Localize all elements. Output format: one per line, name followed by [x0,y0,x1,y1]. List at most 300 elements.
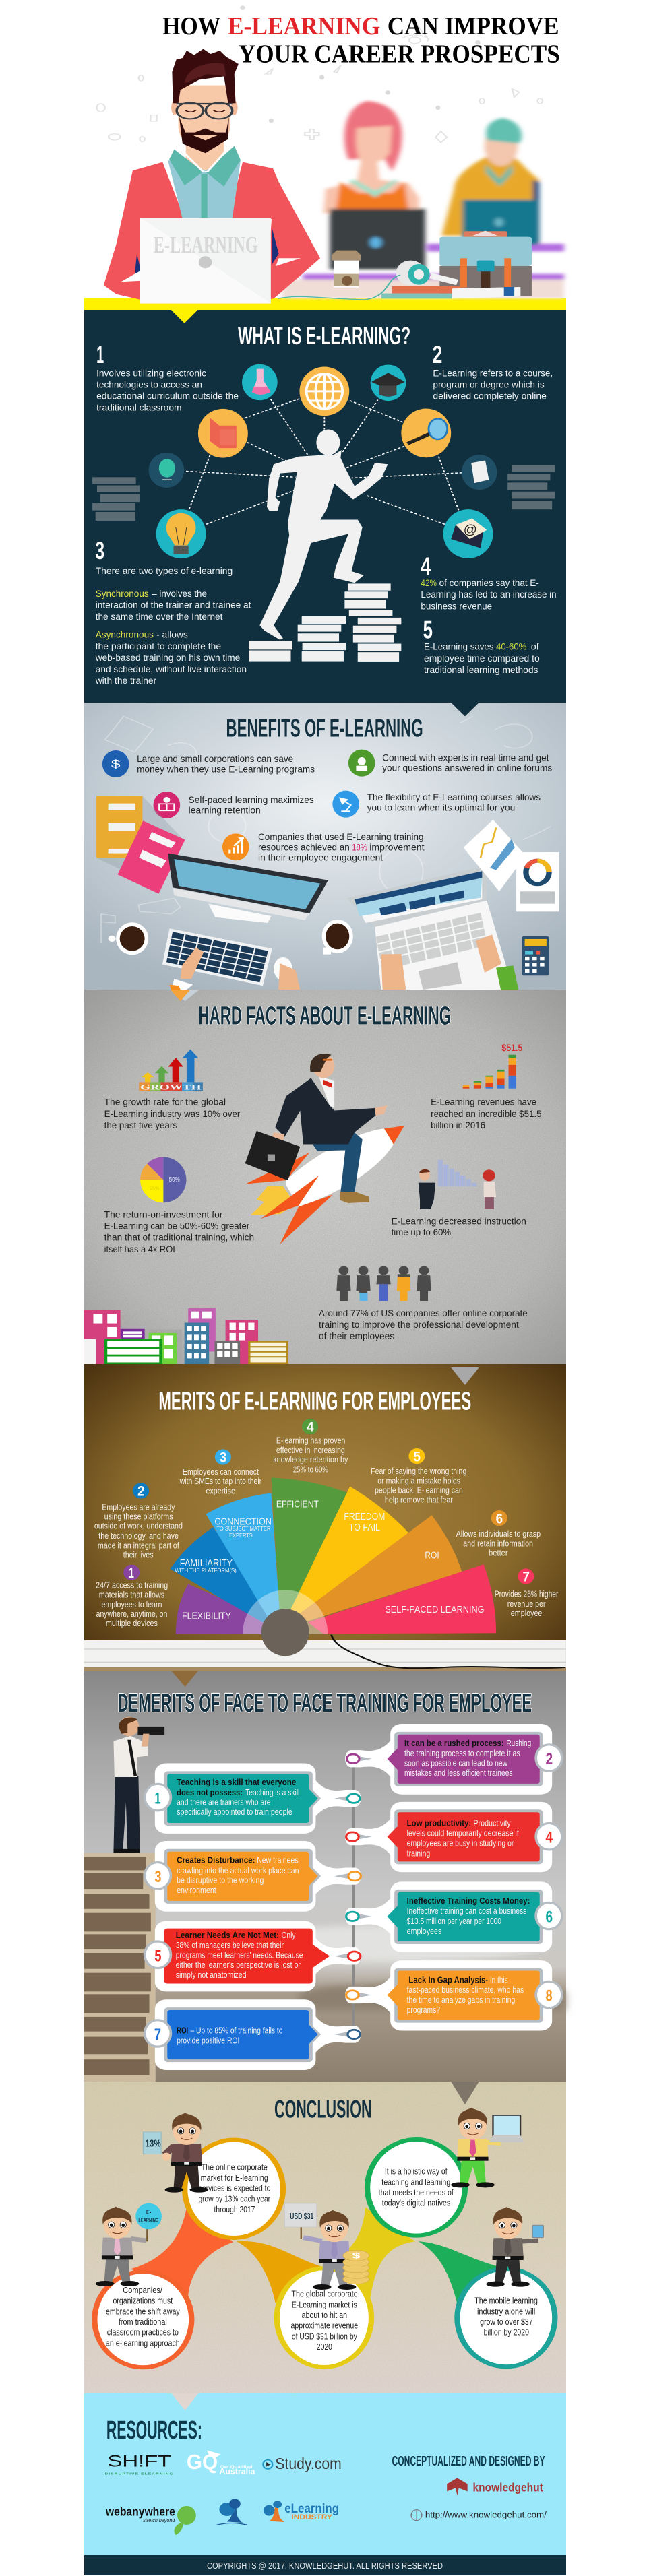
card 5: Only [282,1931,296,1941]
card 4: Productivity [473,1818,511,1828]
text block 2: E-Learning refers to a course, [433,368,553,379]
panel: merits [84,1364,566,1672]
text block 5: of [531,642,540,652]
panel: conclusion [84,2082,566,2393]
merit 6: 6 [496,1511,503,1526]
benefit: connect with experts: your questions answered in online forums [382,763,552,773]
benefit: engagement: resources achieved an [258,842,350,853]
card 6: Ineffective Training Costs Money: [407,1896,530,1906]
pie chart [140,1157,186,1202]
card 8: Lack In Gap Analysis- [408,1975,488,1985]
text: return on investment: itself has a 4x ROI [104,1244,175,1254]
footer bar: COPYRIGHTS @ 2017. KNOWLEDGEHUT. ALL RIGHTS RESERVED [207,2561,443,2571]
timeline [352,1754,355,2037]
benefit: connect with experts [348,750,552,777]
icon: graduation cap [371,364,406,401]
card 1: specifically appointed to train people [177,1807,292,1817]
icon: man with laptop: E-LEARNING [154,232,258,258]
text: return on investment [104,1209,254,1254]
icon: city buildings [84,1308,288,1364]
logo: get qualified australia: Australia [219,2467,255,2476]
card 8: fast-paced business climate, who has [407,1985,524,1995]
icon: globe [299,367,349,416]
segment labels: CONNECTION [214,1516,272,1527]
card 7 [145,1999,361,2070]
circle 4: today's digital natives [382,2199,451,2208]
merit 7: employee [511,1609,542,1618]
text block 2: delivered completely online [433,391,547,401]
merit 1: 24/7 access to training [96,1581,168,1590]
merit 3: with SMEs to tap into their [179,1477,261,1486]
figure: man with 13% sign [143,2113,208,2193]
text block 4: 42% [421,578,437,589]
benefit: engagement: improvement [369,842,425,853]
circle 4 [367,2139,465,2236]
circle 3: The global corporate [291,2290,358,2299]
card 2 [345,1724,562,1795]
benefit: flexibility: you to learn when its optimal for you [367,802,515,813]
benefit: engagement: 18% [352,842,367,853]
text block 4: 4 [421,552,431,580]
benefit: flexibility [332,791,541,818]
text block 1: educational curriculum outside the [96,391,239,401]
segment labels: TO FAIL [349,1522,380,1533]
merit 4: E-learning has proven [276,1436,345,1446]
merit 3: Employees can connect [183,1467,259,1477]
figure: man with tablet [486,2207,543,2287]
circle 5: industry alone will [477,2307,535,2317]
text: revenues [431,1097,541,1130]
icon: red book [198,409,248,458]
text block 3: There are two types of e-learning [96,566,233,576]
text: corporate training: Around 77% of US companies offer online corporate [319,1308,528,1318]
benefit: save money: Large and small corporations can save [137,754,293,764]
text: growth rate: the past five years [104,1120,177,1130]
merit 3 [179,1449,261,1496]
segment labels: WITH THE PLATFORM(S) [175,1568,237,1574]
card 5: simply not anatomized [176,1970,247,1981]
card 5: 38% of managers believe that their [176,1941,284,1951]
card 5 [145,1921,361,1991]
circle 5 [457,2269,555,2366]
merit 5: people back. E-learning can [375,1486,463,1495]
logo: shift: DISRUPTIVE ELEARNING [105,2472,173,2476]
text block 1: traditional classroom [96,403,182,413]
bar chart: revenues: $51.5 [501,1043,522,1053]
logo: get qualified australia: Get Qualified [220,2464,253,2470]
benefit: save money [102,750,315,777]
logo: get qualified australia: GQ [187,2450,218,2474]
card 4: training [407,1848,430,1859]
icon: magnifier [401,409,451,457]
segment labels: FREEDOM [344,1511,385,1522]
panel: benefits [84,703,566,990]
benefit: engagement: in their employee engagement [258,852,383,863]
icon: man with laptop [104,49,320,304]
merit 5 [371,1448,466,1505]
text: revenues: billion in 2016 [431,1120,485,1130]
logo: shift: S H ! F T [107,2453,171,2470]
icon: email [443,509,493,558]
footer bar [84,2555,566,2575]
merit 5: Fear of saying the wrong thing [371,1467,466,1476]
arrow: orange and blue notch [171,990,198,1001]
card 4: 4 [545,1829,553,1846]
icon: growth arrows [139,1049,203,1091]
card 6: employees [407,1927,441,1937]
text block 3: interaction of the trainer and trainee at [96,600,251,610]
title: E-LEARNING [228,11,380,40]
segment labels: FAMILIARITY [180,1557,233,1568]
circle 3: E-Learning market is [292,2300,357,2310]
logo: webanywhere [105,2505,196,2535]
card 2: It can be a rushed process: [404,1739,504,1748]
panel: what is e-learning [84,310,566,703]
merit 2: made it an integral part of [98,1541,179,1551]
text: revenues: E-Learning revenues have [431,1097,536,1107]
figure: man with 13% sign: 13% [146,2137,161,2149]
merit 5: 5 [413,1449,421,1464]
circle 1: classroom practices to [107,2328,179,2338]
merit 2 [94,1483,183,1560]
heading: WHAT IS E-LEARNING? [238,321,410,350]
logo: get qualified australia [187,2450,255,2476]
logo: tree icon [217,2499,247,2525]
circle 1: organizations must [113,2296,173,2306]
website link [411,2510,547,2521]
panel: demerits [84,1671,566,2082]
benefit: save money: $ [111,758,121,770]
segment labels [175,1498,485,1621]
card 5: either the learner's perspective is lost or [176,1960,301,1970]
figure: man with e-learning badge [96,2203,162,2286]
benefit: self-paced [154,792,314,818]
card 1 [145,1763,361,1834]
text: return on investment: E-Learning can be 50%-60% greater [104,1221,250,1231]
card 2: mistakes and less efficient trainees [404,1768,513,1778]
card 2: the training process to complete it as [404,1749,520,1758]
card 8: the time to analyze gaps in training [407,1995,515,2005]
text block 5: employee time compared to [424,653,540,664]
text: return on investment: The return-on-investment for [104,1209,223,1220]
circle 3: 2020 [317,2342,332,2352]
text: corporate training: of their employees [319,1331,394,1342]
text block 3: Asynchronous [96,630,154,640]
text: instruction time [392,1216,526,1238]
icon: keyboard and mouse [162,928,300,990]
text block 2: 2 [432,340,442,368]
figure: man with usd sign and coins: USD $31 [290,2212,313,2221]
text: growth rate [104,1097,241,1130]
band: yellow divider [84,298,566,310]
card 2: 2 [545,1751,553,1768]
panel: resources [84,2393,566,2555]
card 2: Rushing [506,1739,531,1748]
merit 7 [495,1568,558,1618]
logo: elearning industry: eLearning [284,2501,339,2515]
text block 4: Learning has led to an increase in [421,589,557,600]
circle 5: The mobile learning [474,2296,538,2306]
benefit: flexibility: The flexibility of E-Learning courses allows [367,792,541,802]
chart: fan of merits [170,1477,565,1668]
merit 7: Provides 26% higher [495,1590,558,1599]
text block 4: of companies say that E- [439,578,539,589]
text block 4: business revenue [421,602,492,612]
text block 1: technologies to access an [96,380,202,390]
icon: desktop monitor [168,854,328,923]
text block 1: Involves utilizing electronic [96,368,206,379]
arrow: grey notch [451,1367,479,1385]
card 4: Low productivity: [407,1818,471,1828]
merit 6: and retain information [463,1539,533,1549]
card 1: Teaching is a skill [245,1788,299,1798]
logo: study.com [263,2455,342,2472]
text block 3: web-based training on his own time [95,653,240,664]
card 4: levels could temporarily decrease if [407,1828,519,1838]
logo: elearning industry [264,2501,339,2522]
merit 2: using these platforms [104,1512,173,1522]
figure: man with telescope [113,1717,164,1853]
benefit: engagement [222,832,425,863]
card 2: soon as possible can lead to new [404,1758,508,1768]
arrow: pink notch [171,2393,198,2410]
circle 2: market for E-learning [201,2173,268,2183]
panel: conclusion: CONCLUSION [274,2094,372,2123]
pie chart: 50% [169,1176,180,1183]
merit 4: 25% to 60% [293,1465,328,1475]
circle 3: about to hit an [302,2311,347,2320]
circle 4: that meets the needs of [379,2188,454,2197]
logo: webanywhere: stretch beyond [143,2517,175,2523]
circle 3: approximate revenue [291,2321,358,2331]
merit 2: their lives [123,1551,154,1560]
card 6 [345,1881,562,1952]
bar chart: revenues [463,1043,522,1089]
segment labels: EXPERTS [229,1533,253,1539]
merit 5: help remove that fear [385,1495,453,1505]
ribbons between circles [131,2208,504,2304]
circle 1: Companies/ [123,2286,162,2295]
panel: header hero [96,5,564,304]
merit 4 [273,1419,348,1475]
text block 1: 1 [96,340,104,368]
benefit: self-paced: Self-paced learning maximizes [189,795,314,805]
panel: hard facts [84,990,566,1364]
figure: man with e-learning badge: E- [146,2210,151,2216]
merit 6: better [489,1549,508,1558]
card 7: 7 [154,2026,161,2043]
merit 1: materials that allows [99,1590,164,1600]
panel: resources: RESOURCES: [106,2416,202,2444]
figure: man with usd sign and coins: $ [352,2252,360,2261]
circle 1: from traditional [119,2317,167,2327]
text block 4 [421,552,557,612]
text block 5: 5 [423,616,433,644]
text block 5: 40-60% [496,642,527,652]
segment labels: ROI [425,1549,439,1561]
card 8 [345,1960,562,2030]
card 8: 8 [545,1987,553,2005]
card 6: $13.5 million per year per 1000 [407,1917,501,1927]
icon: book pile [84,1853,156,2082]
text block 5: E-Learning saves [424,642,494,652]
landscape hills [237,1925,565,2010]
circle 1: embrace the shift away [106,2307,180,2317]
merit 5: or making a mistake holds [377,1477,460,1486]
text: growth rate: E-Learning industry was 10% over [104,1109,241,1119]
card 1: Teaching is a skill that everyone [177,1778,296,1788]
icon: lightbulb [156,509,206,558]
icon: desk items [278,231,532,300]
merit 1: 1 [129,1566,134,1581]
circle 3 [277,2268,371,2367]
merit 4: 4 [307,1419,314,1435]
merit 4: effective in increasing [276,1446,345,1455]
icon: growth arrows: GROWTH [140,1083,202,1091]
segment labels: EFFICIENT [276,1498,319,1510]
diagram: dashed connectors [186,399,462,524]
segment labels: TO SUBJECT MATTER [216,1526,271,1532]
card 3: New trainees [257,1856,299,1865]
logo: knowledgehut [447,2478,543,2496]
benefit: connect with experts: Connect with experts in real time and get [382,752,549,763]
merit 2: outside of work, understand [94,1522,183,1531]
text block 3: Synchronous [96,589,149,600]
circle 1 [94,2272,191,2367]
figure: rocket man [245,1054,404,1244]
icon: book stacks grey [92,465,555,521]
benefit: engagement: Companies that used E-Learning training [258,832,424,842]
figure: man with e-learning badge: LEARNING [138,2218,158,2224]
text block 3: and schedule, without live interaction [96,664,247,675]
arrow: tan notch [171,1671,198,1687]
circle 4: teaching and learning [381,2178,450,2187]
card 3: Creates Disturbance: [177,1856,255,1865]
arrow: grey notch [451,2082,479,2104]
text: corporate training: training to improve the professional development [319,1320,519,1330]
merit 6: Allows individuals to grasp [456,1529,541,1539]
benefit: save money: money when they use E-Learning programs [137,764,315,775]
icon: flask [242,364,278,400]
card 7: – Up to 85% of training fails to [190,2026,283,2036]
circle 2: grow by 13% each year [198,2195,270,2204]
merit 1: employees to learn [101,1600,162,1609]
logo: study.com: Study.com [275,2455,342,2472]
icon: laptop [347,866,518,990]
text block 2: program or degree which is [433,380,545,390]
text: corporate training [319,1308,528,1342]
icon: email: @ [464,523,477,537]
card 5: programs meet learners' needs. Because [176,1950,303,1960]
merit 1: anywhere, anytime, on [96,1609,167,1619]
circle 2: through 2017 [214,2205,255,2214]
title [162,11,560,68]
text block 3: - allows [156,630,188,640]
pictogram: five people [336,1266,431,1301]
card 3: 3 [154,1869,162,1886]
card 8: programs? [407,2005,440,2016]
merit 3: 3 [220,1450,226,1466]
card 5: 5 [154,1947,162,1965]
merit 2: the technology, and have [98,1531,179,1541]
circle 2 [185,2140,283,2238]
blurred coworkers [282,101,564,298]
card 1: and there are trainers who are [177,1798,271,1807]
icon: book steps [249,583,401,662]
card 3: crawling into the actual work place can [177,1866,299,1875]
card 4: employees are busy in studying or [407,1838,514,1848]
circle 5: grow to over $37 [480,2317,533,2327]
text block 5: traditional learning methods [424,665,538,675]
merit 4: knowledge retention by [273,1455,348,1464]
figure: man with usd sign and coins [284,2203,369,2290]
icon: instruction time chart [419,1160,496,1209]
text: growth rate: The growth rate for the global [104,1097,226,1107]
text block 3: 3 [95,537,104,565]
figure: man with laptop [451,2108,524,2187]
segment labels: FLEXIBILITY [182,1610,231,1621]
merit 7: 7 [522,1569,530,1585]
card 1: 1 [154,1790,161,1807]
arrow: dark notch [451,703,479,716]
card 3 [145,1841,361,1912]
merit 7: revenue per [507,1599,545,1609]
text: instruction time: time up to 60% [392,1227,451,1238]
icon: chart papers [464,820,559,911]
logo: knowledgehut: knowledgehut [472,2480,543,2494]
logo: elearning industry: INDUSTRY [291,2513,332,2521]
card 4 [345,1802,562,1872]
icon: calculator [522,936,549,975]
icon: small globe [149,453,184,488]
card 3: be disruptive to the working [177,1875,264,1886]
circle 4: It is a holistic way of [385,2167,448,2177]
text block 5 [423,616,540,675]
merit 6 [456,1510,541,1558]
card 1: does not possess: [177,1788,243,1798]
background doodles [96,25,543,143]
skirting board [84,1640,566,1672]
merit 2: Employees are already [102,1503,175,1512]
arrow: yellow notch [171,310,198,323]
card 3: environment [177,1886,216,1896]
background doodles [101,716,551,943]
card 8: In this [490,1975,508,1985]
circle 1: an e-learning approach [106,2339,180,2348]
figure: climbing silhouette [259,430,388,640]
card 6: Ineffective training can cost a business [407,1906,526,1917]
icon: coffee cups [109,920,353,955]
text: instruction time: E-Learning decreased instruction [392,1216,526,1227]
card 6: 6 [545,1908,553,1926]
icon: folder and notebook [96,796,185,894]
segment labels: SELF-PACED LEARNING [385,1604,485,1615]
benefit: self-paced: learning retention [189,805,261,816]
text block 3: with the trainer [95,676,156,686]
card 7: ROI [177,2026,188,2036]
circle 3: of USD $31 billion by [292,2332,357,2342]
text block 3: the participant to complete the [96,641,221,652]
merit 1: multiple devices [106,1619,158,1628]
text block 3 [95,537,251,686]
card 7: provide positive ROI [177,2036,239,2046]
text block 1 [96,340,239,413]
website link: http://www.knowledgehut.com/ [425,2511,547,2520]
title: HOW [162,11,220,40]
merit 2: 2 [137,1483,145,1500]
merit 3: expertise [206,1487,235,1496]
logo: webanywhere: webanywhere [105,2505,175,2518]
